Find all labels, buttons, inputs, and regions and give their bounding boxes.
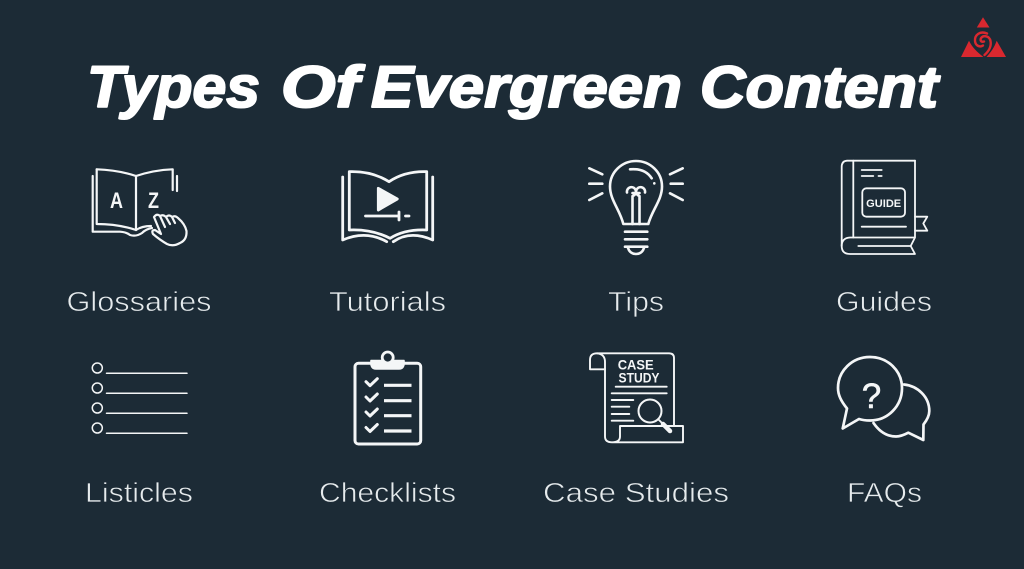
icon: video tutorial book: [343, 172, 433, 242]
icon: A-Z glossary book with hand: A: [110, 188, 123, 213]
icon: case study scroll: [590, 353, 683, 442]
label: Case Studies: Case Studies: [543, 477, 729, 508]
icon: case study scroll: CASE: [618, 356, 654, 372]
icon: A-Z glossary book with hand: [93, 169, 187, 245]
label: Listicles: Listicles: [85, 477, 193, 508]
icon: light bulb: [589, 161, 683, 254]
title: Evergreen: [371, 55, 682, 120]
label: FAQs: FAQs: [847, 477, 922, 508]
icon: clipboard checklist: [355, 352, 421, 444]
icon: A-Z glossary book with hand: Z: [148, 188, 159, 213]
icon: FAQ speech bubbles: ?: [862, 377, 881, 416]
icon: case study scroll: STUDY: [618, 370, 660, 386]
title: Of: [281, 55, 366, 120]
label: Checklists: Checklists: [319, 477, 456, 508]
label: Glossaries: Glossaries: [66, 286, 212, 317]
icon: list: [92, 363, 187, 433]
label: Tips: Tips: [608, 286, 664, 317]
title: Types: [87, 55, 260, 120]
label: Tutorials: Tutorials: [329, 286, 446, 317]
logo: [961, 17, 1006, 57]
icon: guide book: [842, 161, 927, 254]
label: Guides: Guides: [836, 286, 932, 317]
icon: FAQ speech bubbles: [838, 357, 929, 440]
icon: guide book: GUIDE: [866, 198, 901, 210]
title: Content: [700, 55, 941, 120]
title: [87, 55, 941, 120]
